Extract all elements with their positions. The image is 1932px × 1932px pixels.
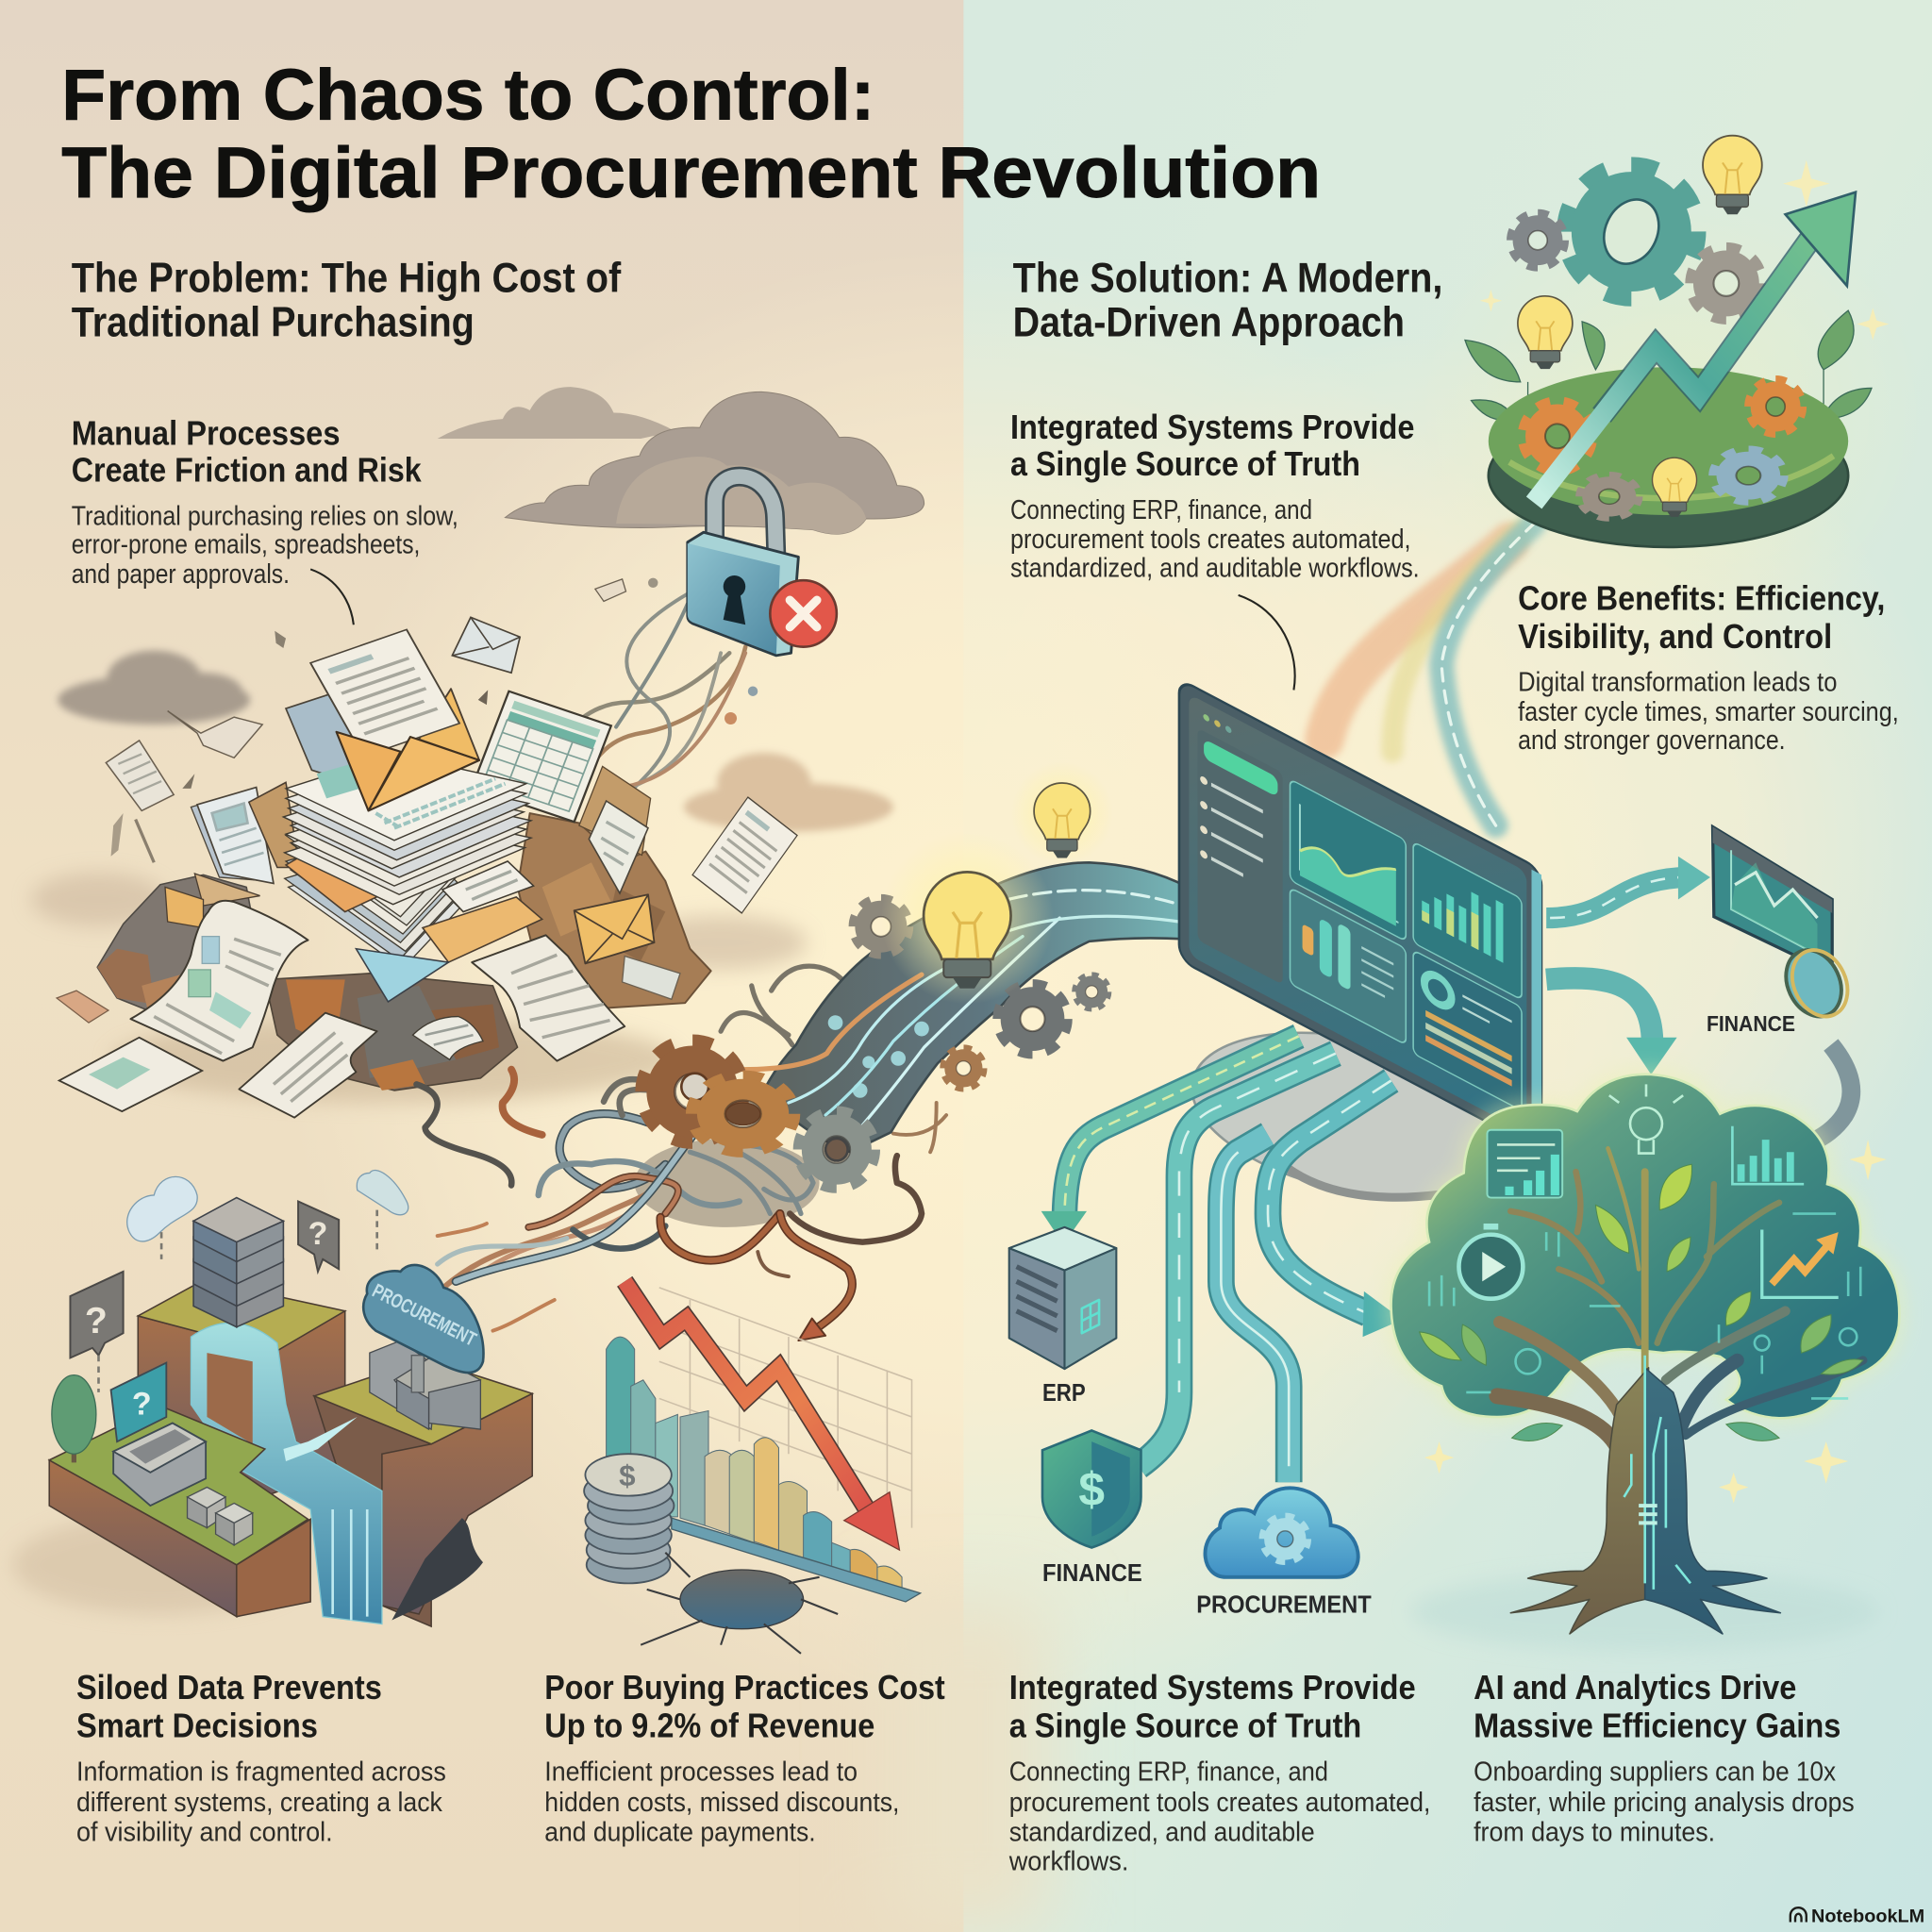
upper paper stack [283,754,531,905]
text: poor buying practices [544,1668,945,1847]
text: core benefits: Core Benefits: Efficiency, [1518,579,1885,618]
wires from lock to pile [542,594,745,801]
trunk and branches [1497,1148,1863,1448]
text: integrated systems (upper): Connecting ERP, finance, and [1010,495,1312,525]
bars [607,1337,902,1589]
bar chart panel [1413,841,1522,1000]
text: integrated systems (upper): a Single Source of Truth [1010,444,1360,483]
growth arrow [1534,192,1856,503]
illustration: rubble mound [57,766,711,1103]
coins: $ [619,1459,636,1492]
server stack [193,1198,283,1327]
icon: large light bulb [881,832,1054,1004]
text: integrated systems (upper): procurement tools creates automated, [1010,525,1411,555]
callout line to monitor [1239,595,1295,690]
text: poor buying practices: and duplicate payments. [544,1817,816,1847]
text: ai and analytics: from days to minutes. [1474,1817,1715,1847]
question bubble left: ? [85,1301,108,1341]
icon: finance chart window [1713,826,1857,1025]
notebooklm mark: NotebookLM [1811,1907,1924,1927]
illustration: data ribbon [743,862,1232,1152]
text: integrated systems (lower): procurement tools creates automated, [1009,1788,1430,1818]
text: ai and analytics: faster, while pricing analysis drops [1474,1788,1855,1818]
donut panel [1413,950,1522,1110]
label: procurement: PROCUREMENT [1196,1591,1372,1619]
laptop [111,1363,206,1506]
orange envelope with letter [310,629,479,810]
panel chart icon [1487,1130,1562,1198]
heading: the solution: Data-Driven Approach [1013,300,1405,346]
text: poor buying practices: hidden costs, missed discounts, [544,1788,899,1818]
grid [659,1288,912,1528]
illustration: siloed data islands [12,1171,532,1626]
line chart panel [1291,779,1406,941]
illustration: tangled wires [416,966,946,1341]
left scroll [130,901,308,1061]
pipe: monitor to ERP [1041,1036,1299,1244]
procurement cloud sign [363,1265,484,1392]
heading: the solution: The Solution: A Modern, [1013,256,1442,302]
text: ai and analytics: Onboarding suppliers can be 10x [1474,1757,1837,1787]
back block [138,1280,345,1503]
icon: finance shield [1042,1430,1141,1547]
text: manual processes: Manual Processes [72,414,340,453]
right block [314,1359,532,1626]
text: core benefits: Digital transformation leads to [1518,668,1837,698]
text: integrated systems (upper): standardized, and auditable workflows. [1010,553,1420,583]
text: siloed data: Information is fragmented across [76,1757,446,1787]
illustration: paper pile [59,629,680,1118]
text: poor buying practices: Inefficient processes lead to [544,1757,858,1787]
title: The Digital Procurement Revolution [61,133,1321,213]
tree canopy [1391,1074,1899,1418]
text: integrated systems (lower): standardized, and auditable [1009,1817,1315,1847]
floating papers and envelopes [106,578,797,913]
illustration: dashboard monitor [1179,679,1541,1151]
platform [1489,404,1848,547]
text: ai and analytics [1474,1668,1855,1847]
text: core benefits: Visibility, and Control [1518,617,1832,656]
text: core benefits [1518,579,1899,756]
icon: procurement cloud [1206,1488,1358,1577]
label: finance: FINANCE [1042,1558,1142,1587]
lower paper stack [285,801,463,969]
heading: the solution [1013,256,1442,346]
text: manual processes: Traditional purchasing relies on slow, [72,501,458,531]
pipe: monitor to procurement [1221,1135,1289,1482]
bulb in canopy [1609,1084,1683,1154]
text: manual processes: error-prone emails, spreadsheets, [72,529,420,559]
plants [1465,310,1872,431]
connector: coin to tree [1808,1045,1851,1143]
waterfall [191,1323,382,1624]
pipe: monitor to tree [1268,1080,1402,1337]
floating gears [1568,168,1695,295]
label: ERP: ERP [1042,1378,1086,1407]
text: integrated systems (lower): workflows. [1008,1847,1128,1877]
text: manual processes: and paper approvals. [72,559,290,590]
text: ai and analytics: Massive Efficiency Gains [1474,1707,1840,1745]
monitor stand [1176,1006,1534,1224]
text: core benefits: and stronger governance. [1518,725,1786,756]
small boxes [188,1487,253,1545]
callout line to pile [310,569,354,625]
text: siloed data: Siloed Data Prevents [76,1668,382,1707]
floating bulbs [1703,136,1762,214]
heading: the problem [72,256,621,346]
hole [641,1553,838,1654]
crack [391,1518,483,1621]
text: ai and analytics: AI and Analytics Drive [1474,1668,1796,1707]
tree [52,1375,96,1462]
title [61,56,1321,213]
text: poor buying practices: Up to 9.2% of Revenue [544,1707,874,1745]
text: integrated systems (upper): Integrated Systems Provide [1010,408,1414,446]
left block [49,1406,310,1617]
illustration: declining bar chart [584,1281,921,1654]
bulb on island [1653,458,1697,517]
right scroll [472,935,625,1061]
canopy glyphs [1429,1214,1860,1398]
text: integrated systems (upper) [1010,408,1420,583]
illustration: digital tree [1391,1074,1899,1651]
small bars panel [1291,888,1406,1044]
red arrow [625,1281,873,1518]
gears on island [1518,397,1597,475]
coins [584,1454,674,1583]
icon: padlock with red x [688,476,837,656]
lower scrolls [59,1013,483,1118]
heading: the problem: The Problem: The High Cost of [72,256,621,302]
title: From Chaos to Control: [61,56,874,136]
text: integrated systems (lower): a Single Source of Truth [1009,1707,1361,1745]
text: poor buying practices: Poor Buying Practices Cost [544,1668,945,1707]
text: manual processes [72,414,458,590]
illustration: growth island [1411,136,1928,653]
small yellow envelope [575,894,655,963]
arrow: monitor to tree [1546,978,1677,1074]
text: integrated systems (lower): Connecting ERP, finance, and [1009,1757,1328,1787]
pipe: monitor to finance [1139,1054,1336,1466]
question bubble right [298,1201,339,1272]
label: finance (upper): FINANCE [1707,1011,1795,1036]
icon: sparkles around the tree [1424,1140,1887,1503]
procurement cloud sign: PROCUREMENT [369,1280,480,1351]
question bubble left [70,1272,124,1357]
laptop: ? [132,1386,152,1422]
sparkles [1480,160,1889,340]
ground shadow [12,1516,308,1614]
text: siloed data: Smart Decisions [76,1707,318,1745]
leaves [1420,1164,1863,1441]
small doc right [589,801,648,893]
icon: ERP server [1009,1227,1116,1369]
bars icon [1732,1126,1804,1184]
text: siloed data: of visibility and control. [76,1817,333,1847]
text: integrated systems (lower) [1008,1668,1430,1877]
icon: small light bulb [1010,761,1114,865]
sidebar [1198,728,1283,985]
text: siloed data: different systems, creating a lack [76,1788,442,1818]
growth chart icon [1762,1230,1839,1297]
heading: the problem: Traditional Purchasing [72,300,475,346]
right block servers [370,1341,480,1429]
text: siloed data [76,1668,446,1847]
stopwatch icon [1458,1224,1523,1299]
text: manual processes: Create Friction and Risk [72,451,422,490]
illustration: streams up to growth island [1324,524,1534,825]
icon: finance shield: $ [1078,1463,1105,1516]
illustration: storm clouds [31,387,924,970]
text: integrated systems (lower): Integrated Systems Provide [1009,1668,1416,1707]
spreadsheet [472,691,611,822]
icon: gears in the transition [643,899,1108,1187]
question bubble right: ? [308,1216,327,1252]
small clouds [127,1171,408,1241]
arrow: monitor to finance window [1546,857,1710,918]
